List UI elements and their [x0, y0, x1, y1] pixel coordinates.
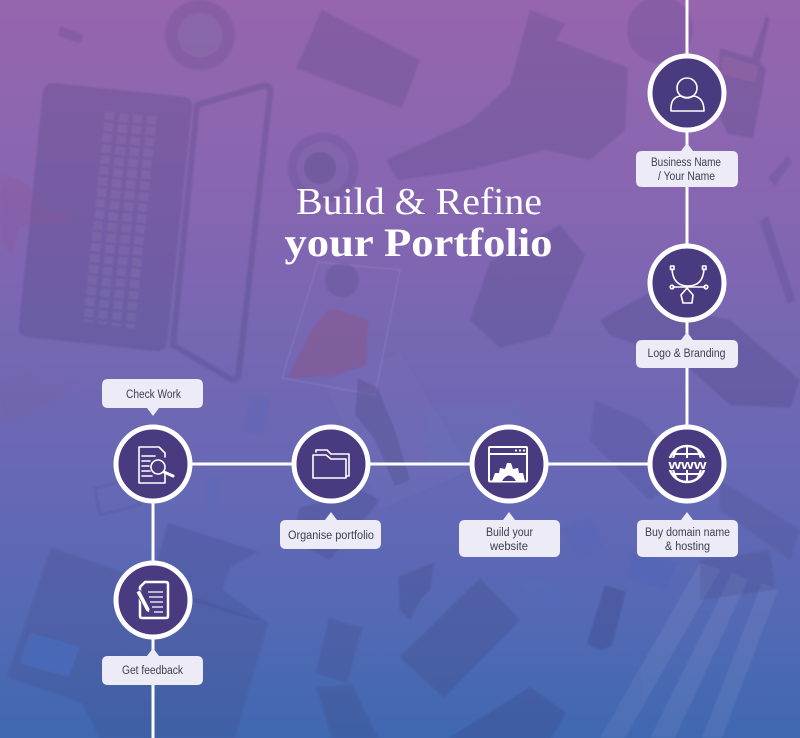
remote — [587, 585, 626, 650]
step: Get feedback — [102, 563, 203, 685]
lens bottom — [316, 618, 362, 683]
label: Buy domain name & hosting: Buy domain name — [645, 527, 730, 539]
icon: document with magnifier — [139, 447, 173, 483]
title: Build & Refine — [296, 181, 542, 223]
speaker grille — [165, 0, 235, 70]
icon: note and pencil — [136, 582, 168, 618]
label: Check Work: Check Work — [126, 389, 181, 401]
label: Buy domain name & hosting — [637, 512, 738, 557]
icon: www globe: www — [667, 457, 708, 472]
label: Organise portfolio: Organise portfolio — [288, 530, 374, 542]
label: Business Name: / Your Name — [658, 171, 715, 183]
label: Business Name — [636, 143, 738, 187]
portrait photo woman — [282, 262, 400, 395]
hand on laptop — [0, 176, 70, 256]
small objects — [250, 397, 268, 404]
second photo — [356, 379, 410, 486]
walkie talkie — [716, 16, 770, 138]
step: Check Work — [102, 379, 203, 501]
icon: person — [671, 78, 704, 111]
laptop — [19, 83, 270, 380]
lipstick — [768, 157, 792, 185]
label: Build your website — [459, 512, 560, 557]
title: your Portfolio — [284, 220, 552, 265]
step: Build your website — [459, 427, 560, 557]
phone — [400, 578, 520, 698]
equipment right — [592, 402, 658, 498]
icon: pen tool — [670, 266, 708, 303]
label: Logo & Branding: Logo & Branding — [648, 348, 726, 360]
folder device beneath organise label — [290, 490, 380, 560]
power adapter — [398, 562, 434, 620]
label: Buy domain name & hosting: & hosting — [665, 541, 710, 553]
tablet with screen bottom left — [7, 523, 268, 738]
camera top — [386, 10, 628, 180]
camera lens centre — [470, 225, 585, 348]
label: Business Name: Business Name — [651, 157, 721, 169]
title — [284, 181, 552, 265]
makeup brush — [760, 216, 795, 304]
icon: folder — [313, 450, 349, 478]
camera bottom — [449, 687, 566, 738]
label: Build your website: website — [489, 541, 528, 553]
zoom lens top — [296, 10, 420, 108]
usb stick top — [58, 26, 83, 43]
label: Build your website: Build your — [486, 527, 533, 539]
label: Get feedback: Get feedback — [122, 665, 183, 677]
lens cap top right — [627, 0, 693, 63]
tripod legs — [600, 563, 778, 738]
step: Logo & Branding — [636, 246, 738, 368]
lens — [288, 133, 358, 203]
icon: browser window with gear — [489, 447, 527, 482]
tripod head — [700, 550, 775, 600]
step: Buy domain name & hosting — [637, 427, 738, 557]
hand lower left — [0, 358, 80, 425]
camera bottom right — [600, 292, 800, 408]
step: Business Name — [636, 56, 738, 187]
step: Organise portfolio — [280, 427, 381, 549]
connector lines — [153, 0, 687, 738]
